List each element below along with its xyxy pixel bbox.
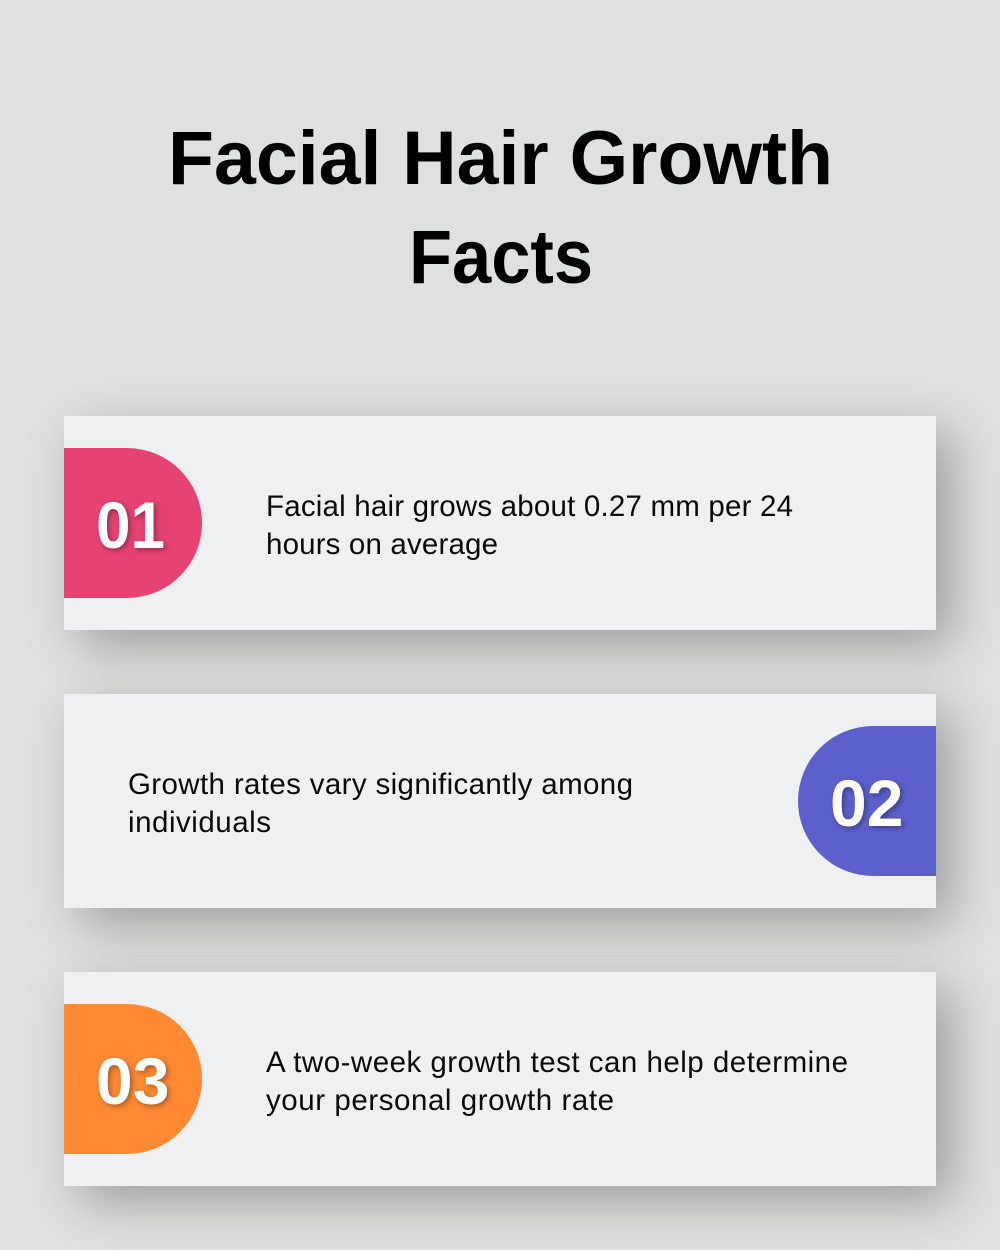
badge: 03: 03 bbox=[96, 1044, 169, 1118]
text: fact 03 bbox=[266, 1046, 848, 1117]
title: Facts bbox=[409, 215, 593, 300]
panel: fact 01 bbox=[64, 416, 936, 630]
badge: 02: 02 bbox=[830, 766, 903, 840]
panel: fact 02 bbox=[64, 694, 936, 908]
panel: fact 03 bbox=[64, 972, 936, 1186]
badge: 02 bbox=[798, 726, 936, 876]
text: fact 02: individuals bbox=[128, 806, 271, 839]
text: fact 02: Growth rates vary significantly among bbox=[128, 768, 633, 801]
text: fact 03: A two-week growth test can help determine bbox=[266, 1046, 848, 1079]
text: fact 01: hours on average bbox=[266, 528, 498, 561]
badge: 03 bbox=[64, 1004, 202, 1154]
text: fact 03: your personal growth rate bbox=[266, 1084, 614, 1117]
text: fact 01: Facial hair grows about 0.27 mm per 24 bbox=[266, 490, 793, 523]
text: fact 02 bbox=[128, 768, 633, 839]
text: fact 01 bbox=[266, 490, 793, 561]
badge: 01 bbox=[64, 448, 202, 598]
title: Facial Hair Growth bbox=[168, 116, 833, 201]
title bbox=[168, 116, 833, 300]
badge: 01: 01 bbox=[96, 488, 165, 562]
